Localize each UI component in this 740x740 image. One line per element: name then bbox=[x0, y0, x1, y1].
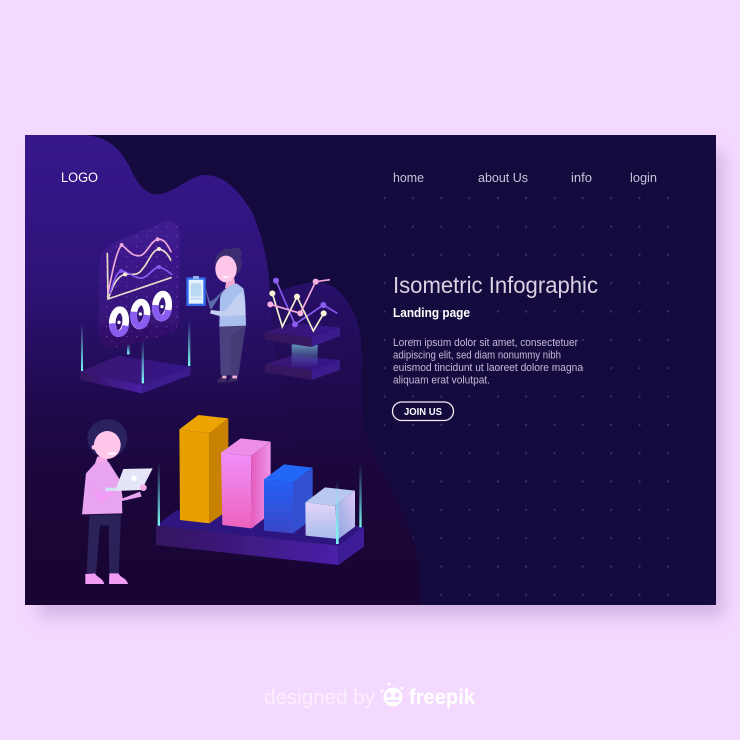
body text bbox=[393, 337, 583, 386]
bar chart platform bbox=[156, 510, 364, 565]
body text: Lorem ipsum dolor sit amet, consectetuer bbox=[393, 337, 578, 349]
person: presenter with clipboard bbox=[186, 247, 246, 382]
body text: aliquam erat volutpat. bbox=[393, 374, 490, 386]
bar: white bbox=[305, 487, 355, 539]
platform: upper small bbox=[265, 323, 340, 347]
clipboard bbox=[186, 276, 206, 306]
background blob: secondary bbox=[240, 282, 420, 605]
bar: orange bbox=[179, 415, 228, 523]
nav: about us: about Us bbox=[478, 170, 528, 185]
subheading: Landing page bbox=[393, 305, 470, 320]
bar: pink bbox=[221, 438, 271, 528]
person: laptop user bbox=[82, 419, 153, 584]
illustration: bar chart and laptop user bbox=[82, 415, 364, 584]
footer: designed by freepik bbox=[264, 682, 475, 709]
footer text: designed by: designed by bbox=[264, 687, 375, 709]
footer text: freepik: freepik bbox=[409, 686, 475, 709]
background blob: main bbox=[25, 135, 345, 605]
bar: blue bbox=[264, 464, 313, 533]
nav: info: info bbox=[571, 170, 592, 185]
light rods bbox=[158, 462, 362, 544]
illustration: dashboard and presenter bbox=[80, 221, 340, 393]
nav: home: home bbox=[393, 170, 424, 185]
panel: landing page bbox=[25, 135, 716, 605]
dashboard screen bbox=[98, 221, 180, 348]
nav: login: login bbox=[630, 170, 657, 185]
icon: freepik mascot bbox=[380, 682, 404, 706]
logo: LOGO bbox=[61, 170, 98, 185]
heading: Isometric Infographic bbox=[393, 272, 598, 298]
light rods bbox=[81, 320, 190, 383]
platform: dashboard base bbox=[80, 356, 191, 393]
body text: euismod tincidunt ut laoreet dolore magna bbox=[393, 362, 583, 374]
line chart bbox=[107, 237, 172, 299]
platform: lower small bbox=[265, 356, 340, 380]
button: join us: JOIN US bbox=[404, 407, 442, 418]
panel shadow bbox=[38, 150, 724, 618]
small line chart bbox=[267, 278, 337, 331]
body text: adipiscing elit, sed diam nonummy nibh bbox=[393, 350, 561, 362]
laptop bbox=[106, 468, 153, 491]
glowing column bbox=[292, 344, 318, 366]
navigation bbox=[393, 170, 657, 185]
button: join us bbox=[392, 402, 454, 420]
donut charts bbox=[111, 293, 170, 334]
